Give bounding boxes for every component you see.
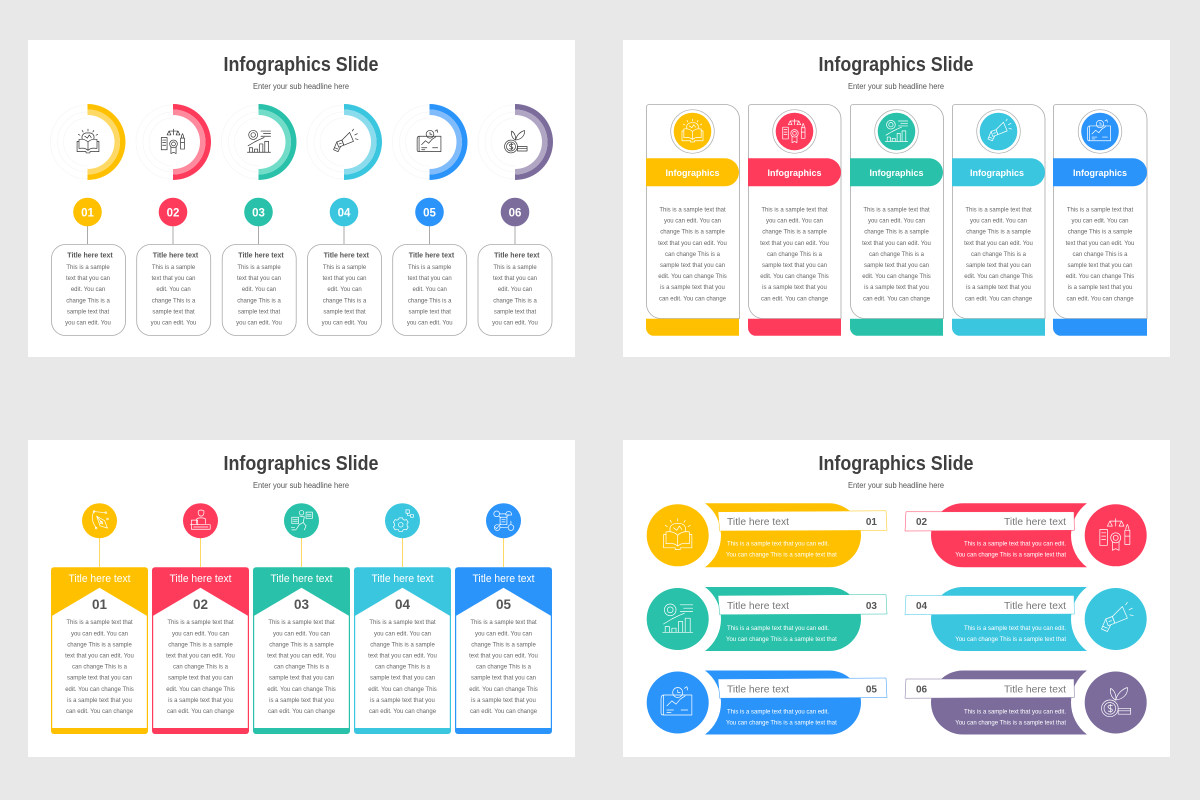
- body text: can change This is a: [72, 665, 128, 671]
- footer strip: [1053, 319, 1147, 336]
- step 05: [392, 104, 468, 336]
- text card 05: edit. You can: [413, 287, 447, 293]
- text card 06: This is a sample: [493, 265, 537, 271]
- number: 05: [496, 597, 511, 612]
- pill: [931, 670, 1087, 734]
- body text: text that you can edit. You: [658, 241, 727, 247]
- body text: edit. You can change This: [658, 274, 727, 280]
- body text: is a sample text that you: [660, 285, 725, 291]
- body text: can change This is a: [274, 665, 330, 671]
- body text: can change This is a: [869, 252, 925, 258]
- body text: edit. You can change This: [760, 274, 829, 280]
- body text: change This is a sample: [269, 642, 334, 648]
- title bar: 05: [866, 684, 877, 696]
- body text: This is a sample text that: [761, 208, 828, 214]
- card 4: [952, 104, 1045, 336]
- body text: [862, 208, 931, 302]
- body text: change This is a sample: [67, 642, 132, 648]
- body text: edit. You can change This: [862, 274, 931, 280]
- header title: Title here text: [472, 573, 534, 585]
- title: Infographics Slide: [224, 54, 378, 76]
- card 1: [646, 104, 740, 336]
- icon badge: [1078, 110, 1122, 153]
- text card 02: This is a sample: [152, 265, 196, 271]
- row 02: [905, 503, 1147, 567]
- icon badge: [773, 110, 816, 153]
- body text: can change This is a: [665, 252, 721, 258]
- body text: can change This is a: [1073, 252, 1128, 258]
- icon circle: [1085, 504, 1147, 566]
- header title: Title here text: [372, 573, 434, 585]
- text card 05: Title here text: [409, 252, 455, 260]
- body text: [166, 620, 235, 715]
- body text: sample text that you can: [762, 263, 827, 269]
- title bar: [718, 678, 887, 698]
- body text: is a sample text that you: [471, 698, 536, 704]
- body text: This is a sample text that you can edit.: [964, 542, 1066, 548]
- ring chart 02: [136, 104, 211, 180]
- body text: you can edit. You can: [475, 631, 532, 637]
- subtitle: Enter your sub headline here: [253, 481, 350, 490]
- body text: edit. You can change This: [964, 274, 1033, 280]
- body text: you can edit. You can: [374, 631, 431, 637]
- icon: book: [77, 129, 99, 153]
- body text: edit. You can change This: [368, 687, 437, 693]
- text card 03: you can edit. You: [236, 320, 282, 326]
- body text: can edit. You can change: [659, 296, 727, 302]
- body text: you can edit. You can: [766, 219, 823, 225]
- body text: edit. You can change This: [267, 687, 336, 693]
- header title: Title here text: [270, 573, 332, 585]
- body text: You can change This is a sample text that: [955, 637, 1066, 643]
- card frame and header: [354, 567, 451, 734]
- banner: Infographics: [869, 168, 924, 178]
- icon circle: [647, 588, 709, 650]
- text card 04: change This is a: [323, 298, 367, 304]
- number badge 02: 02: [167, 207, 179, 219]
- body text: text that you can edit. You: [166, 654, 235, 660]
- body text: sample text that you can: [660, 263, 725, 269]
- body text: change This is a sample: [864, 230, 929, 236]
- banner: Infographics: [970, 168, 1024, 178]
- body text: You can change This is a sample text that: [955, 721, 1066, 727]
- body text: edit. You can change This: [65, 687, 134, 693]
- body text: change This is a sample: [660, 230, 725, 236]
- footer strip: [952, 319, 1045, 336]
- number badge 01: [73, 198, 102, 244]
- body text: [726, 626, 837, 643]
- text card 05: text that you can: [408, 276, 452, 282]
- panel: pill rows: [623, 440, 1170, 757]
- banner: Infographics: [1073, 168, 1127, 178]
- body text: can change This is a: [476, 665, 532, 671]
- step 03: [222, 104, 296, 336]
- body text: change This is a sample: [966, 230, 1031, 236]
- text card 06: change This is a: [493, 298, 537, 304]
- number: 01: [92, 597, 107, 612]
- body text: [658, 208, 727, 302]
- body text: sample text that you can: [471, 676, 536, 682]
- body text: sample text that you can: [1067, 263, 1133, 269]
- card frame and header: [253, 567, 350, 734]
- title: Infographics Slide: [818, 453, 974, 475]
- banner: [646, 158, 739, 186]
- icon: megaphone: [334, 129, 358, 152]
- text card 01: This is a sample: [66, 265, 110, 271]
- body text: change This is a sample: [1068, 230, 1133, 236]
- body text: can edit. You can change: [470, 709, 538, 715]
- pill: [705, 670, 861, 734]
- text card 01: change This is a: [66, 298, 110, 304]
- text card 04: Title here text: [324, 252, 370, 260]
- body text: you can edit. You can: [868, 219, 925, 225]
- number badge 03: [244, 198, 273, 244]
- body text: text that you can edit. You: [368, 654, 437, 660]
- panel: banner cards: [623, 40, 1170, 357]
- body text: is a sample text that you: [269, 698, 334, 704]
- card 5: [1053, 104, 1147, 336]
- title bar: [905, 512, 1074, 531]
- text card 03: change This is a: [237, 298, 281, 304]
- body text: change This is a sample: [168, 642, 233, 648]
- text card 06: Title here text: [494, 252, 540, 260]
- banner: [850, 158, 943, 186]
- text card 04: This is a sample: [323, 265, 367, 271]
- title bar: 01: [866, 517, 877, 528]
- icon circle: [1085, 588, 1147, 650]
- ring chart 05: [392, 104, 468, 180]
- icon circle: [647, 672, 709, 734]
- number badge 03: 03: [252, 207, 265, 219]
- ring chart 06: [478, 104, 553, 180]
- column 4: [354, 503, 451, 734]
- text card 01: edit. You can: [71, 287, 105, 293]
- column 3: [253, 503, 350, 734]
- body text: [955, 710, 1066, 727]
- ring chart 03: [222, 104, 296, 180]
- body text: text that you can edit. You: [469, 654, 538, 660]
- header title: Title here text: [170, 573, 232, 585]
- number badge 01: 01: [81, 207, 94, 219]
- text card 01: sample text that: [67, 309, 110, 315]
- text card 04: [308, 244, 382, 336]
- body text: edit. You can change This: [1066, 274, 1134, 280]
- text card 04: you can edit. You: [322, 320, 367, 326]
- body text: you can edit. You can: [273, 631, 330, 637]
- title bar: Title here text: [1004, 516, 1066, 528]
- number: 03: [294, 597, 309, 612]
- body text: can edit. You can change: [66, 709, 134, 715]
- body text: can edit. You can change: [167, 709, 235, 715]
- icon badge: [385, 503, 420, 567]
- title bar: 04: [916, 601, 928, 612]
- title bar: Title here text: [727, 684, 789, 696]
- text card 06: sample text that: [494, 309, 537, 315]
- title bar: [718, 511, 887, 531]
- body text: text that you can edit. You: [1066, 241, 1134, 247]
- step 06: [478, 104, 553, 336]
- banner: [748, 158, 841, 186]
- step 04: [307, 104, 382, 336]
- body text: text that you can edit. You: [267, 654, 336, 660]
- column 1: [51, 503, 148, 734]
- subtitle: Enter your sub headline here: [848, 82, 945, 91]
- body text: can change This is a: [767, 252, 823, 258]
- body text: [469, 620, 538, 715]
- text card 01: Title here text: [67, 252, 113, 260]
- title bar: 06: [916, 684, 928, 696]
- body text: You can change This is a sample text that: [726, 721, 837, 727]
- body text: text that you can edit. You: [760, 241, 829, 247]
- body text: [726, 542, 837, 559]
- text card 05: [393, 244, 467, 336]
- text card 04: edit. You can: [327, 287, 362, 293]
- number badge 04: [330, 198, 358, 244]
- body text: This is a sample text that you can edit.: [964, 710, 1066, 716]
- banner: [1053, 158, 1147, 186]
- row 03: [647, 587, 887, 651]
- body text: sample text that you can: [370, 676, 435, 682]
- body text: This is a sample text that you can edit.: [727, 542, 829, 548]
- title bar: 02: [916, 517, 928, 528]
- body text: you can edit. You can: [664, 219, 721, 225]
- body text: is a sample text that you: [966, 285, 1031, 291]
- title bar: [905, 679, 1074, 698]
- body text: [955, 542, 1066, 559]
- body text: You can change This is a sample text that: [726, 637, 837, 643]
- text card 02: text that you can: [151, 276, 196, 282]
- footer strip: [646, 319, 739, 336]
- text card 01: [52, 244, 126, 336]
- body text: [65, 620, 134, 715]
- column 2: [152, 503, 249, 734]
- body text: can edit. You can change: [268, 709, 336, 715]
- text card 02: Title here text: [153, 252, 199, 260]
- body text: This is a sample text that: [268, 620, 335, 626]
- icon badge: [486, 503, 521, 567]
- icon badge: [284, 503, 319, 567]
- body text: edit. You can change This: [166, 687, 235, 693]
- body text: This is a sample text that: [66, 620, 133, 626]
- text card 03: sample text that: [238, 309, 281, 315]
- banner: Infographics: [767, 168, 822, 178]
- panel: ring steps: [28, 40, 575, 357]
- pill: [931, 503, 1087, 567]
- body text: text that you can edit. You: [862, 241, 931, 247]
- number badge 06: 06: [509, 207, 521, 219]
- body text: sample text that you can: [864, 263, 929, 269]
- icon badge: [82, 503, 117, 567]
- body text: is a sample text that you: [67, 698, 132, 704]
- body text: [267, 620, 336, 715]
- body text: [1066, 208, 1134, 302]
- body text: can change This is a: [173, 665, 229, 671]
- body text: This is a sample text that: [863, 208, 930, 214]
- icon: map: [417, 130, 441, 152]
- body text: can change This is a: [971, 252, 1027, 258]
- text card 04: sample text that: [323, 309, 366, 315]
- body text: is a sample text that you: [762, 285, 827, 291]
- title bar: [905, 596, 1074, 615]
- ring chart 04: [307, 104, 382, 180]
- body text: you can edit. You can: [71, 631, 128, 637]
- body text: text that you can edit. You: [964, 241, 1033, 247]
- body text: [955, 626, 1066, 643]
- body text: This is a sample text that: [1067, 208, 1134, 214]
- step 01: [50, 104, 126, 336]
- body text: sample text that you can: [966, 263, 1031, 269]
- body text: This is a sample text that you can edit.: [727, 626, 829, 632]
- icon circle: [1085, 672, 1147, 734]
- body text: This is a sample text that: [167, 620, 234, 626]
- body text: [760, 208, 829, 302]
- body text: [368, 620, 437, 715]
- body text: is a sample text that you: [1068, 285, 1132, 291]
- text card 05: sample text that: [409, 309, 451, 315]
- body text: change This is a sample: [370, 642, 435, 648]
- text card 01: text that you can: [66, 276, 110, 282]
- body text: can edit. You can change: [965, 296, 1033, 302]
- number: 02: [193, 597, 208, 612]
- number badge 02: [159, 198, 187, 244]
- text card 02: edit. You can: [156, 287, 191, 293]
- text card 06: edit. You can: [498, 287, 532, 293]
- row 06: [905, 670, 1147, 734]
- header title: Title here text: [68, 573, 130, 585]
- text card 03: text that you can: [237, 276, 281, 282]
- body text: is a sample text that you: [370, 698, 435, 704]
- footer strip: [850, 319, 943, 336]
- card frame and header: [455, 567, 552, 734]
- body text: You can change This is a sample text that: [955, 553, 1066, 559]
- body text: This is a sample text that: [659, 208, 726, 214]
- number badge 04: 04: [338, 207, 351, 219]
- body text: change This is a sample: [762, 230, 827, 236]
- body text: you can edit. You can: [172, 631, 229, 637]
- icon: plant: [505, 130, 527, 153]
- text card 05: you can edit. You: [407, 320, 453, 326]
- row 01: [647, 503, 887, 567]
- body text: can edit. You can change: [1066, 296, 1134, 302]
- text card 05: change This is a: [408, 298, 452, 304]
- text card 06: text that you can: [493, 276, 537, 282]
- body text: This is a sample text that: [369, 620, 436, 626]
- body text: edit. You can change This: [469, 687, 538, 693]
- body text: [964, 208, 1033, 302]
- footer strip: [748, 319, 841, 336]
- row 05: [647, 670, 887, 734]
- subtitle: Enter your sub headline here: [848, 481, 945, 490]
- body text: text that you can edit. You: [65, 654, 134, 660]
- title bar: Title here text: [727, 600, 789, 612]
- column 5: [455, 503, 552, 734]
- icon badge: [977, 110, 1020, 153]
- title bar: [718, 594, 887, 615]
- title bar: Title here text: [727, 516, 789, 528]
- banner: Infographics: [665, 168, 720, 178]
- number badge 05: [415, 198, 444, 244]
- body text: change This is a sample: [471, 642, 536, 648]
- body text: This is a sample text that: [965, 208, 1032, 214]
- text card 02: change This is a: [152, 298, 196, 304]
- text card 01: you can edit. You: [65, 320, 111, 326]
- body text: can edit. You can change: [863, 296, 931, 302]
- number: 04: [395, 597, 410, 612]
- pill: [705, 587, 861, 651]
- body text: is a sample text that you: [864, 285, 929, 291]
- body text: sample text that you can: [67, 676, 132, 682]
- body text: can change This is a: [375, 665, 431, 671]
- number badge 05: 05: [423, 207, 436, 219]
- title bar: Title here text: [1004, 684, 1066, 696]
- card frame and header: [51, 567, 148, 734]
- step 02: [136, 104, 211, 336]
- card 2: [748, 104, 841, 336]
- icon badge: [183, 503, 218, 567]
- text card 03: Title here text: [238, 252, 284, 260]
- body text: can edit. You can change: [761, 296, 829, 302]
- body text: This is a sample text that you can edit.: [964, 626, 1066, 632]
- body text: sample text that you can: [168, 676, 233, 682]
- body text: you can edit. You can: [970, 219, 1027, 225]
- card frame and header: [152, 567, 249, 734]
- pill: [931, 587, 1087, 651]
- number badge 06: [501, 198, 529, 244]
- body text: This is a sample text that: [470, 620, 537, 626]
- text card 03: edit. You can: [242, 287, 276, 293]
- text card 03: This is a sample: [237, 265, 281, 271]
- icon badge: [875, 110, 918, 153]
- ring chart 01: [50, 104, 126, 180]
- body text: is a sample text that you: [168, 698, 233, 704]
- icon: awards: [161, 129, 184, 154]
- icon circle: [647, 504, 709, 566]
- subtitle: Enter your sub headline here: [253, 82, 350, 91]
- icon: chart: [247, 130, 271, 152]
- text card 05: This is a sample: [408, 265, 452, 271]
- banner: [952, 158, 1045, 186]
- body text: This is a sample text that you can edit.: [727, 710, 829, 716]
- text card 06: you can edit. You: [492, 320, 538, 326]
- card 3: [850, 104, 944, 336]
- title: Infographics Slide: [818, 54, 974, 76]
- title bar: 03: [866, 601, 877, 612]
- panel: house cards: [28, 440, 575, 757]
- body text: [726, 710, 837, 727]
- title: Infographics Slide: [224, 453, 378, 475]
- text card 06: [478, 244, 552, 336]
- body text: can edit. You can change: [369, 709, 437, 715]
- text card 02: you can edit. You: [151, 320, 196, 326]
- icon badge: [671, 110, 714, 153]
- text card 04: text that you can: [322, 276, 367, 282]
- body text: sample text that you can: [269, 676, 334, 682]
- pill: [705, 503, 861, 567]
- text card 02: sample text that: [152, 309, 195, 315]
- row 04: [905, 587, 1147, 651]
- body text: you can edit. You can: [1071, 219, 1129, 225]
- text card 02: [137, 244, 211, 336]
- body text: You can change This is a sample text that: [726, 553, 837, 559]
- title bar: Title here text: [1004, 600, 1066, 612]
- text card 03: [222, 244, 296, 336]
